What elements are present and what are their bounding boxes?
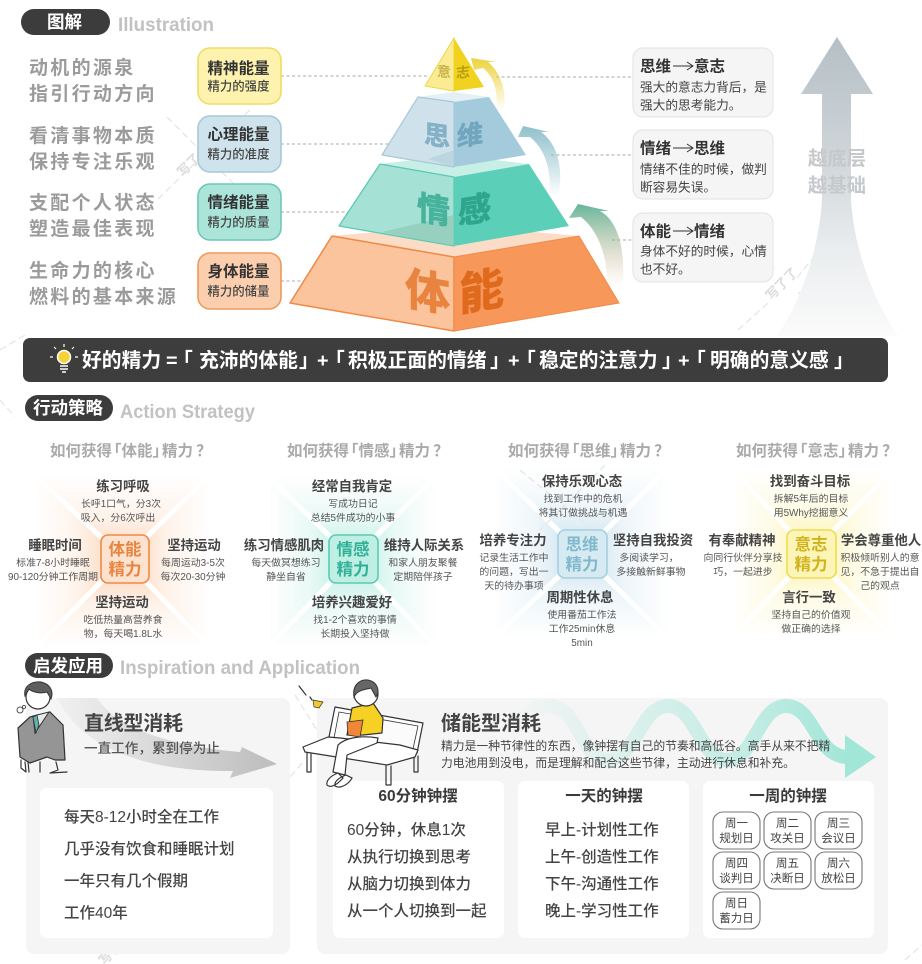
item: respect: 见，不急于提出自 — [840, 565, 920, 578]
card: one day: 下午-沟通性工作 — [545, 875, 659, 893]
layer: thinking: 思 — [424, 119, 450, 153]
box: emotion to thinking: 情绪不佳的时候，做判 — [640, 162, 767, 176]
item: exercise — [161, 537, 225, 583]
card: spirit energy: 精神能量 — [207, 58, 270, 78]
item: dedication: 有奉献精神 — [709, 532, 775, 548]
day: friday: 周五 — [776, 857, 799, 870]
item: diet — [83, 594, 163, 640]
center tag — [787, 530, 836, 578]
arrow: green — [569, 204, 623, 287]
left descriptions: 动机的源泉 — [29, 57, 136, 79]
strategy: emotion: 如何获得「情感」精力？ — [287, 441, 449, 460]
layer: will: 意 — [437, 63, 451, 80]
strategy: emotion — [244, 441, 464, 648]
card: emotional energy — [198, 184, 281, 240]
heading: illustration: Illustration — [118, 15, 214, 36]
banner: + — [508, 350, 520, 372]
card: one week — [703, 781, 874, 938]
description — [441, 739, 831, 770]
banner: 好的精力 — [82, 350, 161, 372]
item: exercise: 坚持运动 — [167, 537, 221, 553]
item: emotional muscle — [244, 537, 324, 583]
day: saturday: 放松日 — [821, 871, 856, 885]
banner: 「 — [686, 350, 706, 372]
item: periodic rest — [547, 589, 617, 649]
day: friday — [764, 852, 811, 889]
item: periodic rest: 周期性休息 — [547, 589, 613, 605]
item: self investment: 多接触新鲜事物 — [616, 565, 686, 578]
card: spirit energy: 精力的强度 — [208, 78, 269, 94]
banner: 充沛的体能 — [199, 349, 298, 372]
card: emotional energy: 精力的质量 — [208, 214, 269, 230]
heading: illustration — [21, 9, 214, 36]
left descriptions: 生命力的核心 — [29, 259, 157, 282]
day: monday — [713, 812, 760, 849]
center tag: 情感 — [336, 539, 370, 559]
item: focus: 天的待办事项 — [484, 579, 544, 592]
card: emotional energy: 情绪能量 — [207, 192, 270, 212]
day: sunday: 周日 — [725, 897, 748, 910]
item: sleep — [8, 538, 98, 583]
item: goals: 用5Why挖掘意义 — [774, 506, 848, 519]
item: optimism: 找到工作中的危机 — [543, 492, 623, 505]
description: 力电池用到没电，而是理解和配合这些节律，主动进行休息和补充。 — [441, 756, 795, 770]
box: thinking to will: 强大的思考能力。 — [640, 98, 742, 112]
item: breathing: 吸入，分6次呼出 — [81, 511, 155, 524]
banner — [23, 338, 888, 382]
heading: inspiration and application: Inspiration and Application — [120, 658, 360, 679]
item: respect: 己的观点 — [860, 579, 900, 592]
banner: 明确的意义感 — [710, 349, 829, 372]
heading: action strategy: 行动策略 — [33, 398, 103, 418]
item: optimism: 保持乐观心态 — [542, 473, 623, 489]
card: 60 minutes: 从脑力切换到体力 — [347, 875, 471, 893]
item: self investment — [613, 532, 693, 578]
box: physical to emotion: 体能 — [640, 222, 672, 240]
item: dedication: 向同行伙伴分享技 — [703, 551, 783, 564]
card: 60 minutes: 60分钟，休息1次 — [347, 820, 466, 839]
card: one day: 早上-计划性工作 — [545, 821, 659, 839]
item: emotional muscle: 练习情感肌肉 — [244, 537, 324, 553]
banner: 「 — [325, 350, 345, 372]
day: saturday — [815, 852, 862, 889]
big upward arrow: 越基础 — [808, 174, 866, 197]
dotted connector lines — [281, 76, 633, 281]
card: physical energy: 身体能量 — [207, 262, 270, 280]
left descriptions: 看清事物本质 — [29, 124, 157, 147]
box: thinking to will: 意志 — [694, 56, 725, 76]
layer: thinking: 维 — [457, 118, 483, 152]
item: respect: 积极倾听别人的意 — [840, 551, 920, 564]
item: breathing — [81, 478, 161, 524]
center tag: 思维 — [566, 535, 598, 554]
box: emotion to thinking: 思维 — [694, 138, 725, 158]
head — [354, 682, 378, 706]
banner: 」 — [490, 350, 510, 372]
book — [347, 720, 363, 737]
left descriptions: 支配个人状态 — [29, 191, 157, 214]
item: periodic rest: 使用番茄工作法 — [547, 608, 617, 621]
item: periodic rest: 5min — [571, 638, 593, 649]
item: consistency: 坚持自己的价值观 — [771, 608, 851, 621]
arrow: blue — [518, 126, 560, 197]
strategy: physical: 如何获得「体能」精力？ — [50, 441, 212, 460]
day: thursday: 谈判日 — [719, 872, 754, 885]
watermarks: 写了 — [174, 150, 203, 179]
box: emotion to thinking: 情绪 — [640, 138, 672, 158]
item: exercise: 每周运动3-5次 — [161, 556, 225, 569]
layer: thinking — [382, 92, 526, 167]
banner: 」 — [834, 350, 854, 372]
center tag: 体能 — [108, 540, 142, 559]
item: goals: 拆解5年后的目标 — [774, 492, 848, 505]
item: hobbies: 找1-2个喜欢的事情 — [313, 613, 397, 626]
icon: person reading on bench — [299, 680, 423, 787]
day: sunday — [713, 892, 760, 929]
layer: physical: 能 — [459, 262, 504, 321]
title: 储能型消耗 — [441, 712, 541, 735]
card: one day: 一天的钟摆 — [565, 787, 643, 805]
item: hobbies — [312, 594, 397, 640]
day: wednesday — [815, 812, 862, 849]
watermark: thinking block — [520, 465, 605, 540]
item: affirmation: 总结5件成功的小事 — [311, 511, 395, 524]
item: emotional muscle: 静坐自省 — [266, 570, 306, 583]
item: sleep: 标准7-8小时睡眠 — [16, 556, 90, 569]
banner: + — [317, 350, 329, 372]
strategy: physical — [8, 441, 225, 648]
watermarks: 写了了 — [763, 265, 801, 303]
item: dedication — [703, 532, 783, 578]
banner: 「 — [173, 350, 193, 372]
banner: 」 — [299, 350, 319, 372]
center tag: 精力 — [566, 555, 598, 574]
item: affirmation: 经常自我肯定 — [312, 478, 392, 494]
description: 精力是一种节律性的东西，像钟摆有自己的节奏和高低谷。高手从来不把精 — [441, 739, 831, 753]
item: relationships: 维持人际关系 — [384, 537, 464, 553]
big upward arrow: 越底层 — [808, 147, 866, 170]
item: sleep: 睡眠时间 — [28, 538, 82, 553]
item: affirmation: 写成功日记 — [328, 498, 378, 510]
icon: tired businessman — [17, 682, 67, 773]
item: respect: 学会尊重他人 — [841, 532, 922, 548]
banner: 积极正面的情绪 — [348, 350, 487, 372]
item: relationships: 定期陪伴孩子 — [393, 570, 453, 583]
legs — [333, 737, 378, 775]
box: emotion to thinking: 断容易失误。 — [640, 180, 716, 194]
item: emotional muscle: 每天做冥想练习 — [251, 556, 321, 569]
item: diet: 物，每天喝1.8L水 — [84, 627, 162, 640]
arrow: grey — [57, 698, 277, 778]
card: one week: 一周的钟摆 — [749, 787, 827, 805]
box: thinking to will: 思维 — [640, 56, 671, 76]
list card — [40, 788, 273, 938]
left descriptions: 指引行动方向 — [29, 82, 157, 105]
box: emotion to thinking — [633, 130, 773, 199]
day: tuesday: 周二 — [776, 817, 799, 830]
center tag — [329, 535, 378, 583]
day: monday: 规划日 — [719, 831, 754, 845]
pyramid — [290, 38, 623, 331]
day: saturday: 周六 — [827, 857, 850, 870]
day: thursday — [713, 852, 760, 889]
heading: inspiration and application: 启发应用 — [33, 656, 103, 676]
item: focus: 培养专注力 — [480, 532, 546, 548]
day: friday: 决断日 — [770, 871, 805, 885]
leaf — [313, 700, 323, 708]
strategy: thinking — [479, 441, 693, 649]
day: sunday: 蓄力日 — [719, 912, 754, 925]
item: consistency: 做正确的选择 — [781, 622, 841, 635]
day: wednesday: 周三 — [827, 817, 850, 830]
layer: emotion: 情 — [417, 190, 450, 232]
item: respect — [840, 532, 922, 592]
card: physical energy — [198, 253, 281, 309]
list card: 工作40年 — [64, 904, 128, 922]
card: 60 minutes: 从执行切换到思考 — [347, 848, 471, 866]
center tag — [101, 535, 149, 583]
item: diet: 坚持运动 — [95, 594, 149, 610]
item: hobbies: 培养兴趣爱好 — [312, 594, 392, 610]
list card: 几乎没有饮食和睡眠计划 — [64, 839, 235, 858]
heading: action strategy — [25, 395, 255, 423]
bench — [328, 707, 423, 753]
layer: emotion — [339, 155, 569, 246]
center tag — [558, 530, 607, 578]
card: 60 minutes: 60分钟钟摆 — [378, 787, 458, 805]
card: spirit energy — [198, 48, 281, 104]
day: wednesday: 会议日 — [821, 832, 856, 845]
banner: + — [678, 350, 690, 372]
banner: 」 — [662, 350, 682, 372]
center tag: 意志 — [794, 534, 828, 554]
item: consistency — [771, 589, 851, 635]
item: diet: 吃低热量高营养食 — [83, 613, 163, 626]
day: tuesday — [764, 812, 811, 849]
card: one day: 上午-创造性工作 — [545, 848, 659, 866]
card: mental energy: 心理能量 — [207, 124, 270, 144]
card: 60 minutes: 从一个人切换到一起 — [347, 902, 487, 920]
item: goals: 找到奋斗目标 — [770, 473, 851, 489]
item: affirmation — [311, 478, 395, 524]
card: 60 minutes — [333, 781, 504, 938]
item: relationships: 和家人朋友聚餐 — [388, 556, 458, 569]
center tag: 精力 — [794, 555, 828, 574]
item: focus: 记录生活工作中 — [479, 551, 549, 564]
item: dedication: 巧，一起进步 — [713, 566, 773, 578]
layer: will — [425, 38, 484, 91]
arrow: yellow — [471, 58, 505, 110]
card: one day — [518, 781, 689, 938]
heading: inspiration and application — [25, 653, 360, 679]
layer: physical: 体 — [405, 263, 450, 322]
box: physical to emotion — [633, 213, 773, 282]
day: tuesday: 攻关日 — [770, 831, 805, 845]
item: breathing: 长呼1口气，分3次 — [81, 497, 161, 510]
item: relationships — [384, 537, 464, 583]
layer: emotion: 感 — [458, 190, 491, 232]
card: mental energy: 精力的准度 — [208, 146, 269, 162]
item: optimism: 将其订做挑战与机遇 — [539, 506, 628, 519]
panel: linear consumption — [26, 698, 290, 954]
strategy: thinking: 如何获得「思维」精力？ — [508, 441, 670, 460]
sweater — [347, 703, 383, 735]
item: self investment: 多阅读学习， — [619, 551, 679, 564]
center tag: 精力 — [108, 560, 142, 579]
list card: 一年只有几个假期 — [64, 872, 188, 890]
banner: 稳定的注意力 — [539, 349, 658, 372]
layer: physical — [290, 225, 619, 331]
box: physical to emotion: 也不好。 — [640, 262, 691, 276]
item: goals — [770, 473, 851, 519]
item: hobbies: 长期投入坚持做 — [320, 627, 390, 640]
banner: 「 — [516, 350, 536, 372]
box: thinking to will — [633, 48, 773, 117]
item: focus — [479, 532, 549, 592]
subtitle: 一直工作，累到停为止 — [84, 740, 220, 756]
item: self investment: 坚持自我投资 — [613, 532, 693, 548]
item: consistency: 言行一致 — [782, 589, 836, 605]
left descriptions: 塑造最佳表现 — [29, 218, 157, 240]
panel: rhythmic consumption — [317, 698, 888, 954]
icon: light bulb — [50, 344, 78, 372]
item: focus: 的问题，写出一 — [479, 565, 549, 578]
day: monday: 周一 — [725, 817, 748, 830]
item: exercise: 每次20-30分钟 — [161, 570, 225, 583]
item: sleep: 90-120分钟工作周期 — [8, 570, 98, 583]
box: thinking to will: 强大的意志力背后，是 — [640, 80, 767, 94]
layer: will: 志 — [456, 64, 470, 81]
title: 直线型消耗 — [84, 712, 183, 735]
day: thursday: 周四 — [725, 857, 748, 870]
energy cards — [198, 48, 281, 309]
box: physical to emotion: 身体不好的时候，心情 — [640, 244, 767, 258]
strategy: will: 如何获得「意志」精力？ — [736, 441, 898, 460]
item: breathing: 练习呼吸 — [96, 478, 150, 494]
left descriptions — [29, 57, 178, 308]
left descriptions: 保持专注乐观 — [29, 151, 157, 173]
heading: illustration: 图解 — [47, 12, 82, 32]
big upward arrow — [777, 37, 898, 336]
card: one day: 晚上-学习性工作 — [545, 901, 659, 920]
list card: 每天8-12小时全在工作 — [64, 807, 219, 826]
strategy: will — [703, 441, 922, 638]
item: periodic rest: 工作25min休息 — [549, 622, 615, 635]
wave arrow — [505, 706, 876, 778]
center tag: 精力 — [336, 560, 370, 579]
left descriptions: 燃料的基本来源 — [29, 286, 178, 308]
card: physical energy: 精力的储量 — [208, 284, 269, 298]
card: mental energy — [198, 116, 281, 172]
banner: = — [166, 350, 178, 372]
heading: action strategy: Action Strategy — [120, 402, 255, 423]
box: physical to emotion: 情绪 — [694, 222, 726, 240]
item: optimism — [539, 473, 628, 519]
relation boxes — [633, 48, 773, 282]
